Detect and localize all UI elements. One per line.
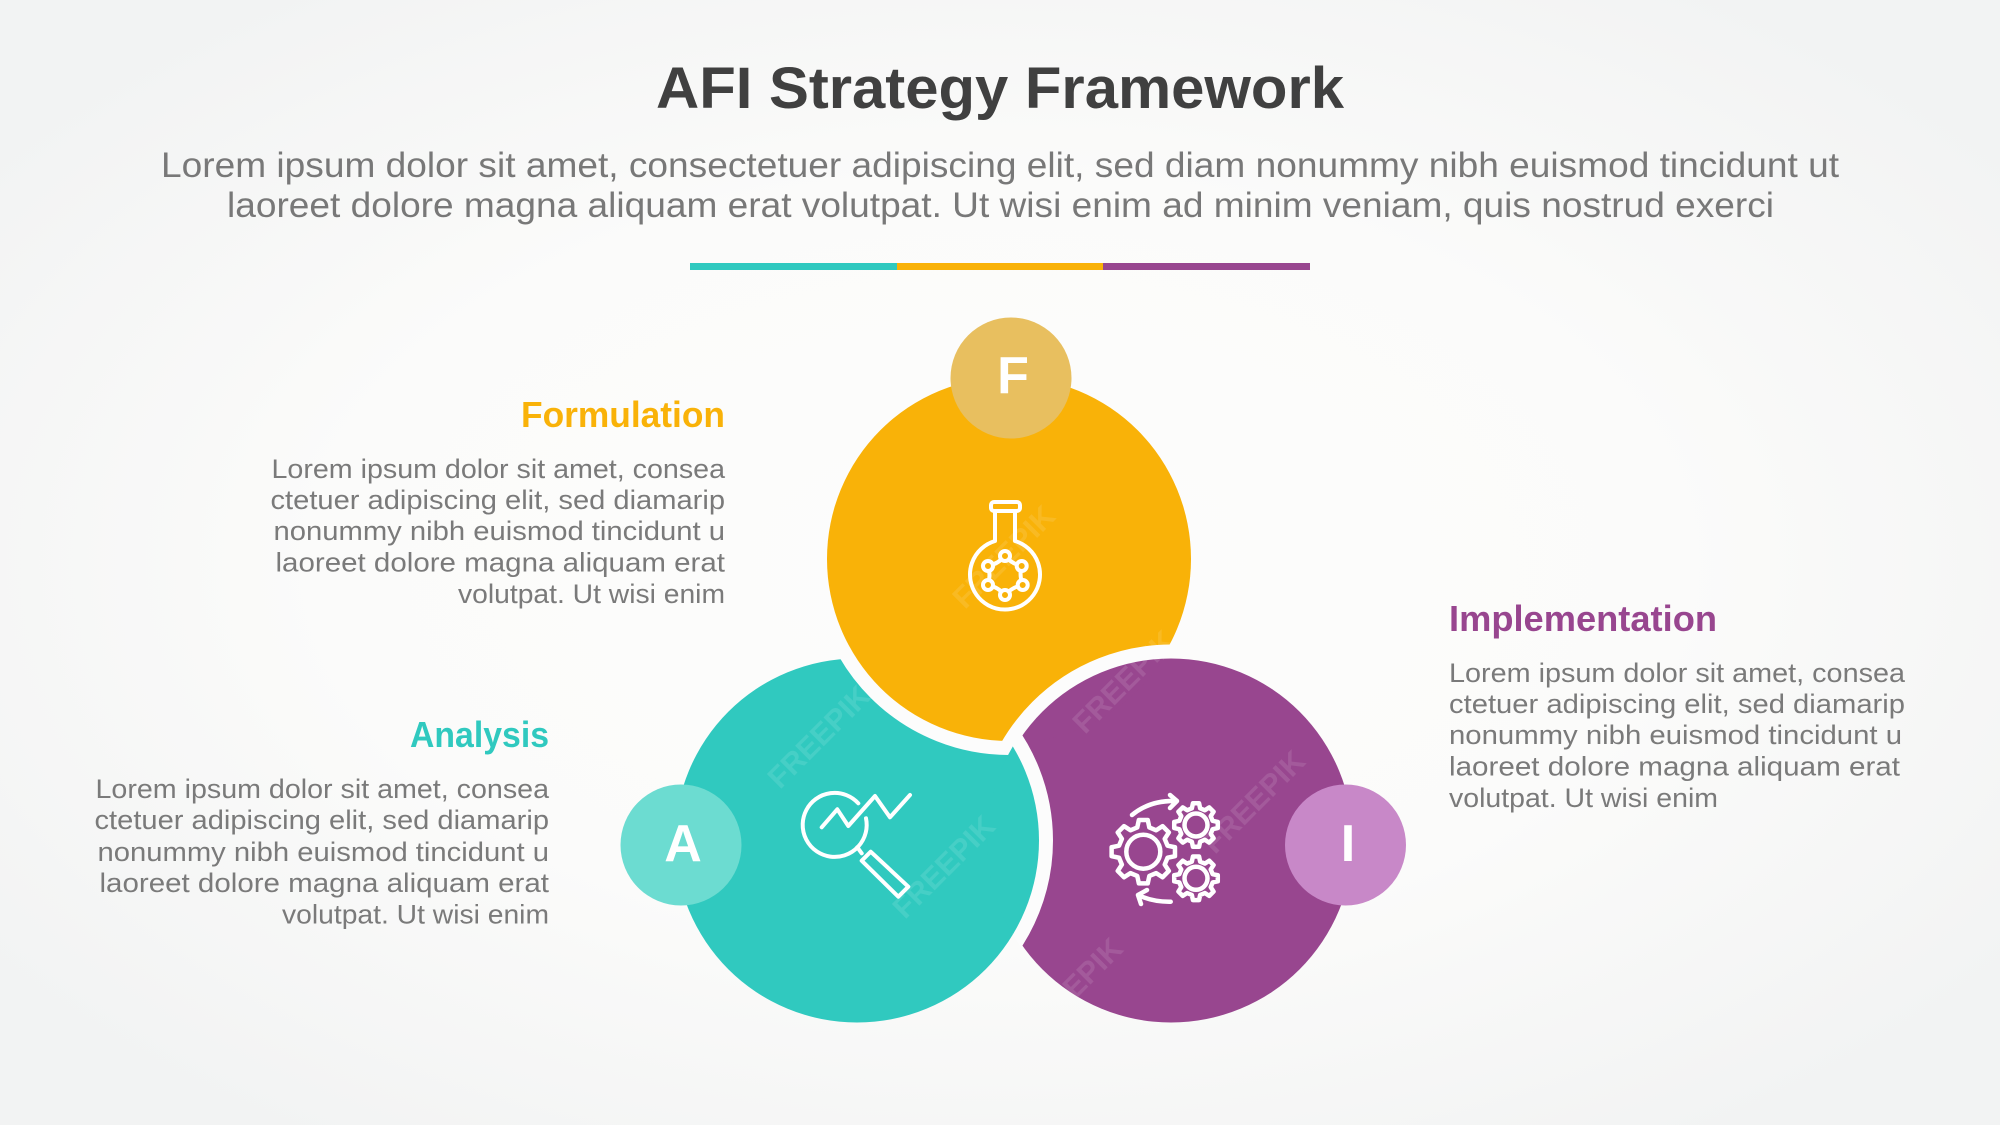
badge: A: A (664, 815, 702, 873)
title: AFI Strategy Framework (656, 56, 1345, 121)
body: Formulation (270, 454, 726, 609)
icon: flask (970, 502, 1040, 610)
badge: F: F (997, 347, 1029, 405)
divider bar: three colours (690, 263, 1310, 270)
watermarks: FREEPIK (1197, 744, 1312, 860)
body: Implementation (1449, 658, 1906, 813)
circle: implementation (989, 658, 1353, 1022)
body: Analysis: laoreet dolore magna aliquam erat (100, 868, 550, 898)
body: Implementation: volutpat. Ut wisi enim (1449, 783, 1718, 813)
heading: Formulation: Formulation (521, 394, 725, 435)
heading: Implementation: Implementation (1449, 598, 1717, 639)
badge: F (950, 318, 1072, 438)
body: Implementation: Lorem ipsum dolor sit amet, consea (1449, 658, 1906, 688)
watermarks: EPIK (1057, 932, 1130, 1005)
body: Formulation: ctetuer adipiscing elit, sed diamarip (270, 485, 725, 515)
subtitle text: Lorem ipsum dolor sit amet, consectetuer adipiscing elit, sed diam nonummy nibh euismod tincidunt ut (161, 146, 1839, 185)
watermarks: FREEPIK (762, 679, 877, 795)
body: Formulation: Lorem ipsum dolor sit amet, consea (272, 454, 726, 484)
overlap: analysis over implementation (989, 736, 1053, 946)
heading: Analysis: Analysis (410, 714, 549, 755)
body: Formulation: laoreet dolore magna aliquam erat (276, 548, 726, 578)
body: Implementation: ctetuer adipiscing elit, sed diamarip (1449, 689, 1905, 719)
body: Analysis: volutpat. Ut wisi enim (282, 900, 549, 930)
overlap: implementation over formulation (1002, 644, 1170, 741)
subtitle text: laoreet dolore magna aliquam erat volutpat. Ut wisi enim ad minim veniam, quis nostrud exerci (227, 186, 1774, 225)
circle: formulation (827, 377, 1191, 741)
badge: A (620, 784, 742, 906)
body: Implementation: nonummy nibh euismod tincidunt u (1449, 720, 1902, 750)
text block: Formulation (270, 394, 726, 609)
badge: I (1285, 784, 1406, 906)
text block: Implementation (1449, 598, 1906, 813)
body: Analysis (94, 774, 550, 930)
body: Analysis: ctetuer adipiscing elit, sed diamarip (94, 805, 549, 835)
gap: formulation ring cutting analysis (840, 658, 1013, 755)
text block: Analysis (94, 714, 550, 930)
subtitle text (161, 146, 1839, 225)
watermarks (762, 499, 1312, 1005)
body: Formulation: volutpat. Ut wisi enim (458, 579, 725, 609)
body: Formulation: nonummy nibh euismod tincidunt u (274, 516, 725, 546)
circle: analysis (675, 658, 1039, 1022)
icon: gears with cycle arrows (1112, 795, 1218, 904)
badge: I: I (1341, 815, 1355, 873)
watermarks: FREEPIK (947, 499, 1062, 615)
body: Analysis: Lorem ipsum dolor sit amet, consea (96, 774, 550, 804)
watermarks: FREEPIK (1067, 624, 1182, 740)
icon: magnifier with chart line (803, 793, 910, 897)
body: Analysis: nonummy nibh euismod tincidunt u (98, 837, 549, 867)
venn diagram of three interlocking circles (668, 370, 1360, 1029)
watermarks: FREEPIK (887, 809, 1002, 925)
body: Implementation: laoreet dolore magna aliquam erat (1449, 752, 1901, 782)
